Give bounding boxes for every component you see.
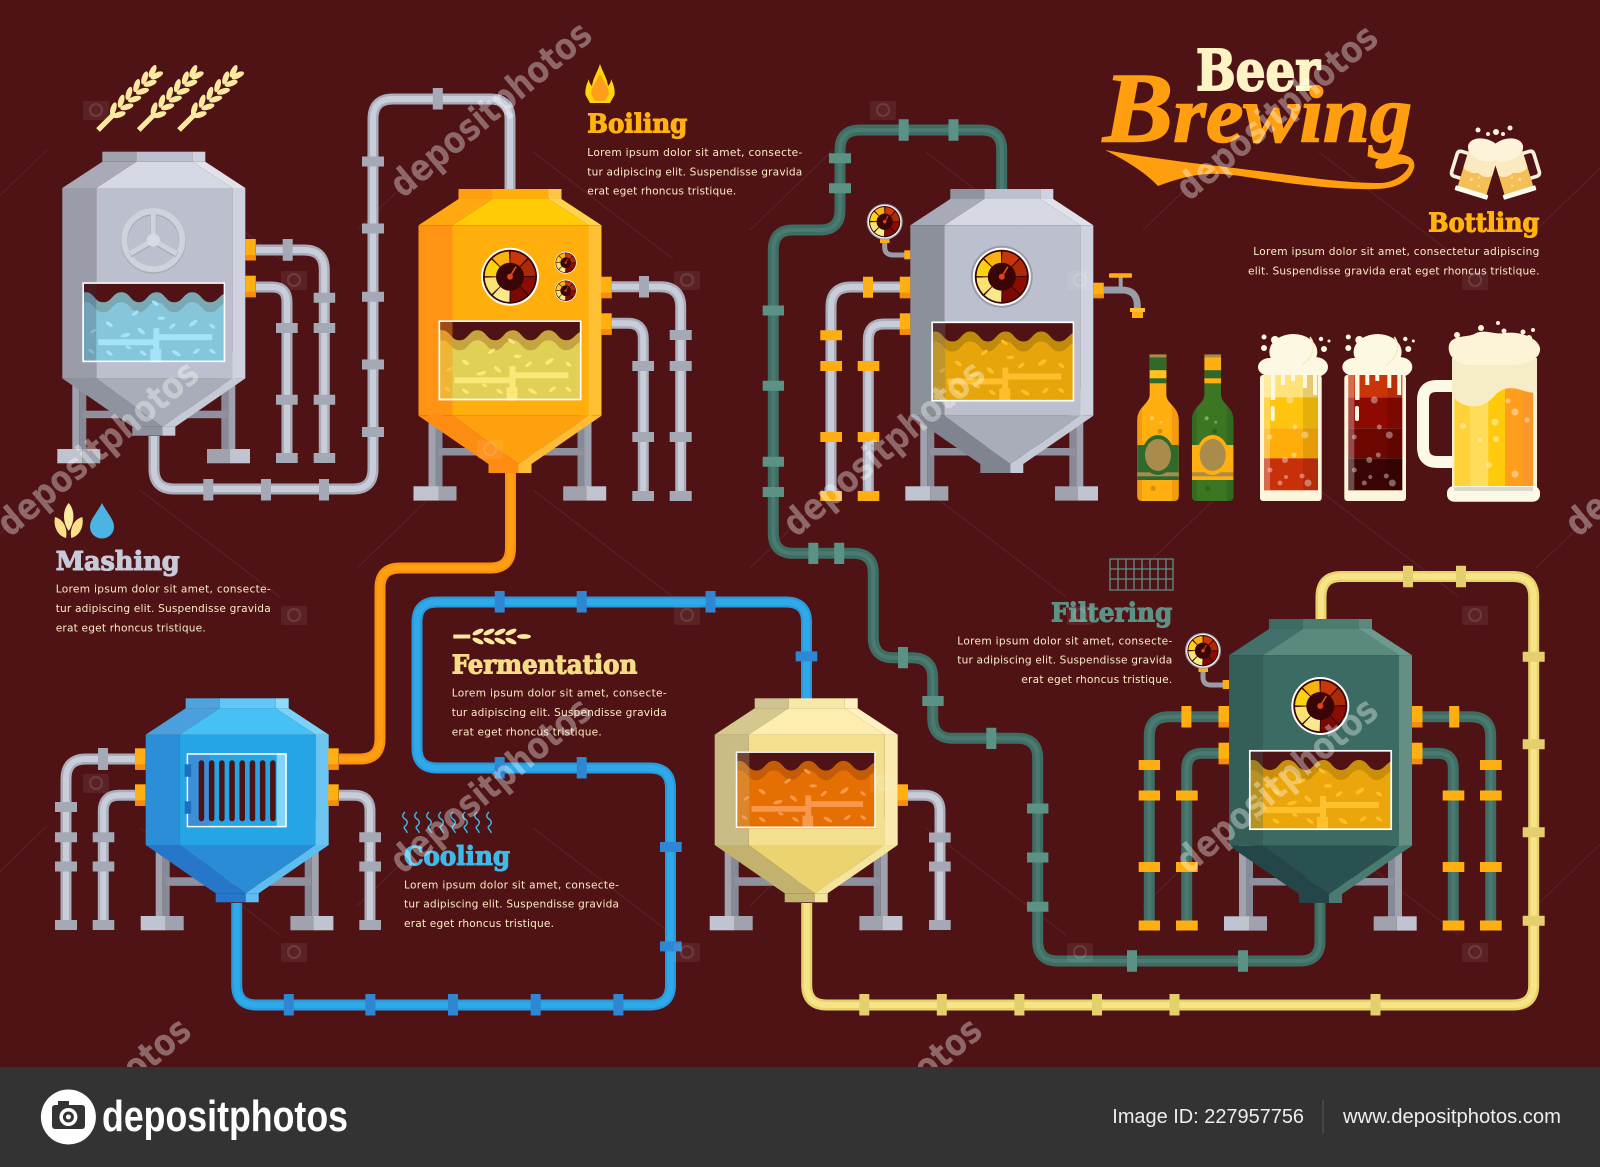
logo icon: [41, 1090, 96, 1144]
body: tur adipiscing elit. Suspendisse gravida: [404, 899, 619, 911]
gauge: main: [1291, 677, 1349, 735]
panel: cooling tank: [141, 698, 333, 930]
panel: fermentation tank: [710, 698, 902, 930]
icon: flame: [585, 64, 615, 103]
connectors: cooling: [135, 748, 339, 806]
text block: mashing: [55, 503, 271, 634]
watermark overlay: depositphotos: [774, 351, 993, 545]
text block: filtering: [957, 559, 1173, 686]
bottle: green: [1192, 354, 1234, 501]
panel: boiling tank: [414, 189, 606, 501]
body: [452, 688, 667, 738]
body: tur adipiscing elit. Suspendisse gravida: [56, 603, 271, 615]
window: mash: [82, 282, 225, 362]
body: erat eget rhoncus tristique.: [587, 186, 736, 198]
pipes: mashing tank loops: [256, 239, 335, 458]
body: Lorem ipsum dolor sit amet, consecte-: [56, 584, 271, 596]
watermark overlay: depositphotos: [1167, 688, 1386, 882]
body: erat eget rhoncus tristique.: [404, 918, 554, 930]
connectors: boiling: [601, 277, 612, 335]
icon: wheat stalks: [91, 61, 248, 137]
image id: Image ID: 227957756: [1112, 1106, 1304, 1128]
text block: fermentation: [452, 627, 667, 738]
heading: Fermentation: [452, 650, 637, 680]
body: Lorem ipsum dolor sit amet, consecte-: [957, 635, 1172, 647]
body: erat eget rhoncus tristique.: [452, 726, 602, 738]
footer bar: [0, 1067, 1600, 1167]
gauge: small bottom: [555, 280, 577, 302]
icon: cooling waves: [403, 812, 491, 833]
gauge: external with stem: [867, 204, 910, 259]
body: [587, 147, 802, 198]
title: [1102, 38, 1414, 189]
window: wort: [438, 320, 582, 400]
window: cooling grille: [185, 753, 287, 827]
gauge: main: [971, 246, 1033, 308]
logo wordmark: depositphotos: [102, 1092, 348, 1141]
connectors: filter: [1218, 706, 1422, 764]
title swoosh: [1105, 150, 1414, 189]
body: elit. Suspendisse gravida erat eget rhoncus tristique.: [1248, 265, 1540, 277]
panel: mashing tank: [57, 152, 250, 463]
title: Brewing: [1102, 53, 1412, 164]
icon: filter grid: [1110, 559, 1173, 590]
pipes: filter tank loops: [1139, 706, 1502, 927]
title: Beer: [1196, 38, 1321, 104]
icon: barley: [55, 503, 83, 538]
body: [56, 584, 271, 634]
text block: boiling: [585, 64, 802, 198]
connectors: bottling tank: [900, 277, 910, 335]
body: [404, 879, 619, 930]
glass: lager: [1258, 334, 1330, 501]
connectors: mashing: [245, 239, 256, 297]
pipes: bottling tank loops: [820, 277, 900, 498]
body: [1248, 246, 1540, 277]
mug: large beer mug: [1423, 321, 1540, 502]
icon: wheat ear: [453, 627, 531, 646]
panel: bottling storage tank: [905, 189, 1098, 501]
connector: fermentation: [898, 784, 908, 806]
body: erat eget rhoncus tristique.: [56, 622, 206, 634]
text block: bottling: [1248, 209, 1540, 277]
body: tur adipiscing elit. Suspendisse gravida: [452, 707, 667, 719]
body: Lorem ipsum dolor sit amet, consecte-: [452, 688, 667, 700]
heading: Boiling: [587, 110, 687, 140]
icon: clinking mugs: [1447, 126, 1544, 200]
icon: water drop: [90, 503, 114, 538]
pipes: cooling tank loops: [55, 748, 951, 927]
body: Lorem ipsum dolor sit amet, consecte-: [587, 147, 802, 159]
body: erat eget rhoncus tristique.: [1021, 674, 1172, 686]
window: fermenting beer: [736, 751, 876, 828]
body: Lorem ipsum dolor sit amet, consectetur adipiscing: [1253, 246, 1539, 258]
pipe: cooling to fermentation: [237, 591, 817, 1016]
heading: Bottling: [1428, 209, 1539, 239]
window: filtered beer: [1249, 750, 1392, 830]
heading: Cooling: [404, 842, 510, 872]
icon: tap: [1093, 273, 1145, 318]
gauge: external with stem: [1185, 633, 1229, 689]
glass: dark beer: [1342, 334, 1415, 501]
body: [957, 635, 1172, 686]
pipe: mashing to boiling: [154, 88, 510, 500]
pipe: boiling to cooling: [339, 473, 510, 759]
window: beer: [931, 322, 1074, 402]
gauge: small top: [555, 252, 577, 274]
pipe: fermentation to filtering: [807, 566, 1545, 1016]
body: Lorem ipsum dolor sit amet, consecte-: [404, 879, 619, 891]
pipe: green line from bottling tank to filter tank: [763, 119, 1320, 972]
body: tur adipiscing elit. Suspendisse gravida: [587, 166, 802, 178]
watermark overlay: depositphotos: [381, 688, 600, 882]
heading: Filtering: [1051, 599, 1172, 629]
text block: cooling: [403, 812, 619, 930]
panel: filter tank: [1224, 619, 1417, 931]
heading: Mashing: [56, 547, 180, 577]
icon: valve wheel: [124, 211, 182, 270]
body: tur adipiscing elit. Suspendisse gravida: [957, 655, 1172, 667]
bottle: amber: [1137, 354, 1179, 501]
gauge: large: [481, 248, 539, 306]
pipes: boiling tank loops: [612, 276, 692, 498]
website: www.depositphotos.com: [1342, 1106, 1561, 1128]
